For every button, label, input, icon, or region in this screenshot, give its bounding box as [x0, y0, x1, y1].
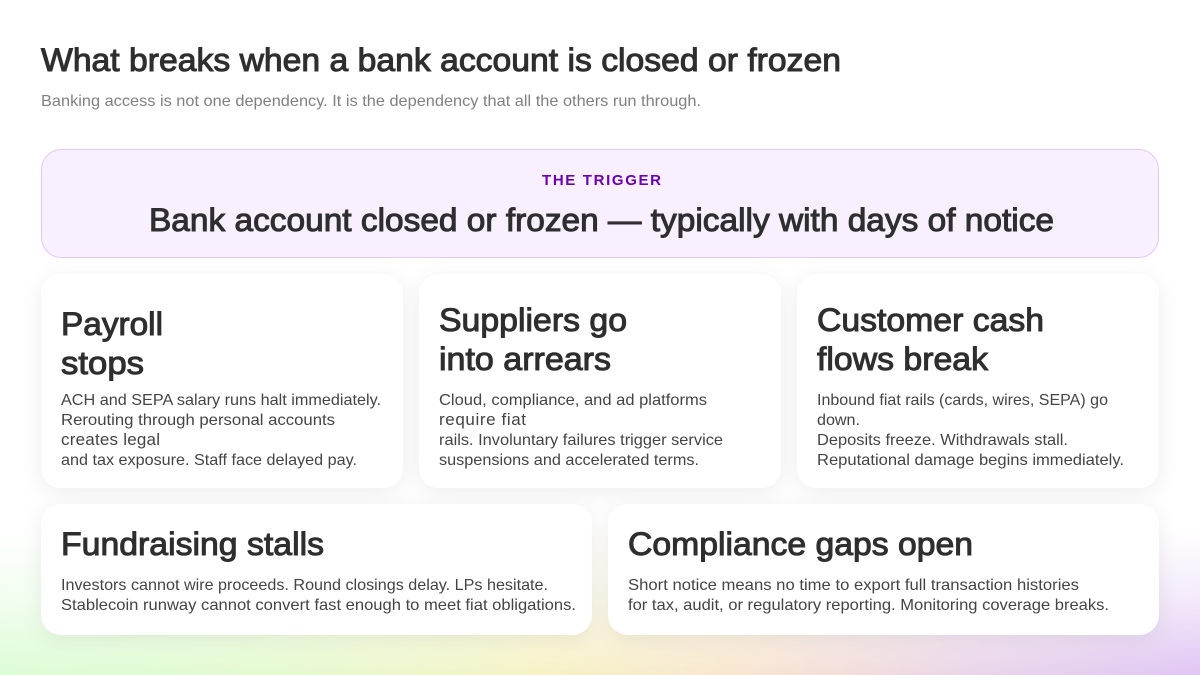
- card heading: Compliance gaps open: [628, 526, 973, 562]
- card body: Stablecoin runway cannot convert fast enough to meet fiat obligations.: [61, 597, 576, 614]
- card heading: Suppliers go: [439, 302, 627, 338]
- card body: Short notice means no time to export full transaction histories: [628, 577, 1079, 594]
- card heading: Fundraising stalls: [61, 526, 324, 562]
- card body: for tax, audit, or regulatory reporting. Monitoring coverage breaks.: [628, 597, 1109, 614]
- card heading: into arrears: [439, 341, 611, 377]
- card body: Inbound fiat rails (cards, wires, SEPA) go: [817, 392, 1108, 409]
- subtitle: Banking access is not one dependency. It is the dependency that all the others run through.: [41, 93, 701, 110]
- card body: Reputational damage begins immediately.: [817, 452, 1124, 469]
- card body: creates legal: [61, 430, 160, 449]
- card body: require fiat: [439, 410, 526, 429]
- card body: and tax exposure. Staff face delayed pay.: [61, 452, 357, 469]
- card: suppliers go into arrears: [419, 274, 781, 488]
- trigger label: THE TRIGGER: [542, 172, 661, 189]
- card body: Cloud, compliance, and ad platforms: [439, 392, 707, 409]
- card body: suspensions and accelerated terms.: [439, 452, 699, 469]
- title: What breaks when a bank account is closed or frozen: [41, 42, 841, 78]
- card heading: flows break: [817, 341, 989, 377]
- card body: rails. Involuntary failures trigger service: [439, 432, 723, 449]
- card: compliance gaps open: [608, 504, 1159, 635]
- card body: Investors cannot wire proceeds. Round closings delay. LPs hesitate.: [61, 577, 548, 594]
- panel: trigger: [42, 150, 1158, 258]
- card heading: stops: [61, 345, 144, 381]
- card body: Rerouting through personal accounts: [61, 412, 335, 429]
- trigger heading: Bank account closed or frozen — typically with days of notice: [149, 202, 1054, 238]
- card heading: Customer cash: [817, 302, 1044, 338]
- card body: down.: [817, 412, 860, 429]
- card: fundraising stalls: [41, 504, 592, 635]
- card body: Deposits freeze. Withdrawals stall.: [817, 432, 1068, 449]
- card: payroll stops: [41, 274, 403, 488]
- card body: ACH and SEPA salary runs halt immediately.: [61, 392, 381, 409]
- card heading: Payroll: [61, 306, 163, 342]
- card: customer cash flows break: [797, 274, 1159, 488]
